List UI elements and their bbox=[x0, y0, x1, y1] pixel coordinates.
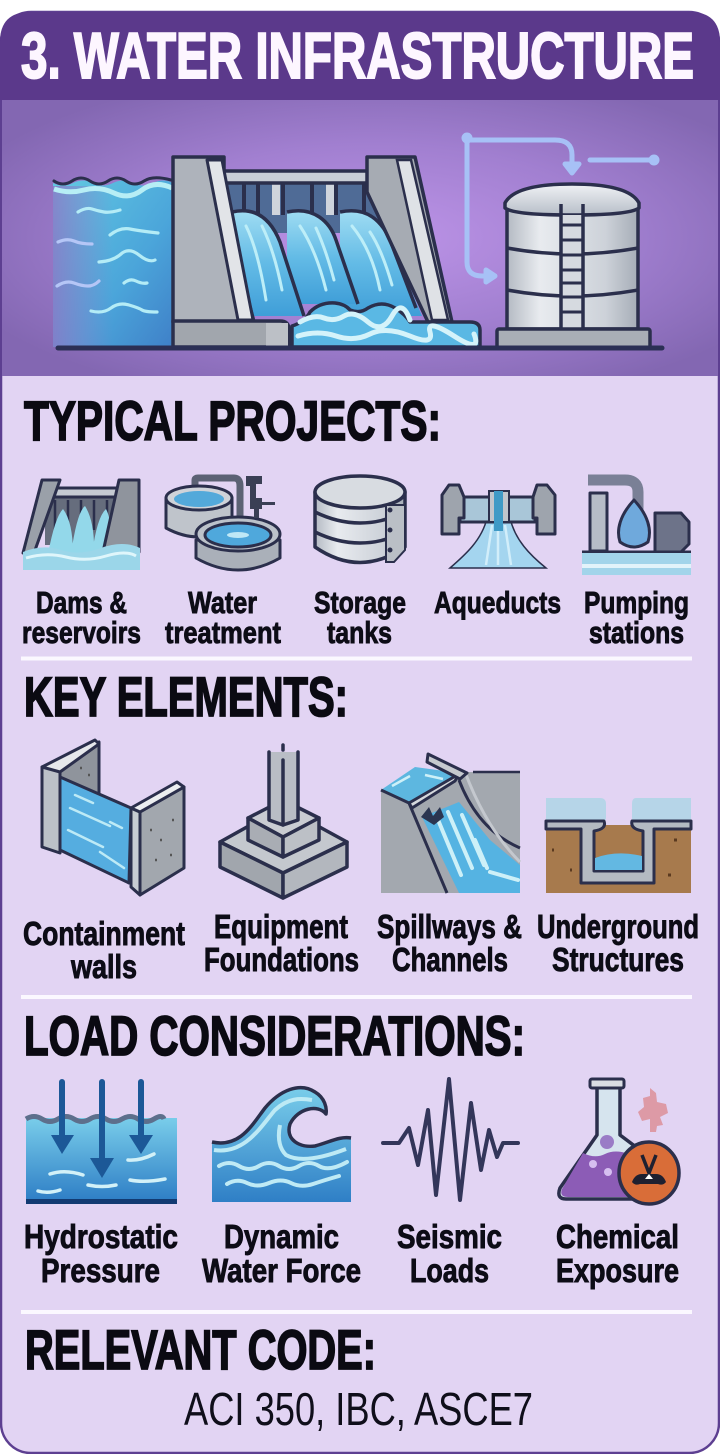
label: equipment foundations: Equipment bbox=[214, 908, 348, 945]
panel: header bar bbox=[0, 12, 720, 100]
label: containment walls bbox=[23, 915, 185, 985]
label: storage tanks: tanks bbox=[327, 615, 392, 650]
label: chemical exposure: Chemical bbox=[556, 1218, 679, 1255]
label: dams and reservoirs: Dams & bbox=[36, 585, 127, 620]
label: pumping stations: stations bbox=[589, 615, 684, 650]
icon: storage tanks bbox=[315, 476, 405, 562]
icon: containment walls bbox=[42, 740, 184, 895]
ground line bbox=[58, 346, 662, 350]
label: hydrostatic pressure: Pressure bbox=[41, 1252, 160, 1289]
label: dynamic water force bbox=[202, 1218, 361, 1289]
label: spillways and channels: Spillways & bbox=[377, 908, 522, 945]
icon: water treatment bbox=[166, 476, 280, 570]
icon: dams and reservoirs bbox=[23, 480, 140, 570]
water tower tank bbox=[497, 184, 650, 348]
label: dynamic water force: Water Force bbox=[202, 1252, 361, 1289]
label: dams and reservoirs: reservoirs bbox=[22, 615, 141, 650]
icon: underground structures bbox=[546, 798, 691, 893]
panel: hero illustration bbox=[2, 100, 718, 376]
reservoir water bbox=[53, 178, 173, 347]
text: code list: ACI 350, IBC, ASCE7 bbox=[184, 1383, 533, 1435]
label: equipment foundations bbox=[204, 908, 359, 978]
icon: chemical flask bbox=[559, 1079, 679, 1204]
icon: spillways and channels bbox=[381, 754, 520, 893]
icon: equipment foundations bbox=[220, 745, 347, 898]
label: containment walls: Containment bbox=[23, 915, 185, 952]
label: underground structures: Structures bbox=[552, 941, 684, 978]
label: dams and reservoirs bbox=[22, 585, 141, 650]
label: storage tanks: Storage bbox=[314, 585, 406, 620]
label: spillways and channels: Channels bbox=[392, 941, 508, 978]
label: chemical exposure bbox=[556, 1218, 679, 1289]
icon: hydrostatic pressure bbox=[26, 1082, 177, 1204]
icon: pumping stations bbox=[582, 480, 691, 575]
label: seismic loads: Seismic bbox=[397, 1218, 502, 1255]
label: storage tanks bbox=[314, 585, 406, 650]
label: hydrostatic pressure bbox=[24, 1218, 178, 1289]
icon: seismic wave bbox=[383, 1079, 518, 1200]
label: pumping stations bbox=[584, 585, 689, 650]
label: aqueducts: Aqueducts bbox=[434, 585, 561, 620]
label: spillways and channels bbox=[377, 908, 522, 978]
label: dynamic water force: Dynamic bbox=[224, 1218, 339, 1255]
label: underground structures bbox=[537, 908, 699, 978]
icon: dynamic water force bbox=[212, 1088, 351, 1202]
label: equipment foundations: Foundations bbox=[204, 941, 359, 978]
label: pumping stations: Pumping bbox=[584, 585, 689, 620]
label: water treatment bbox=[165, 585, 281, 650]
flow pipes and arrows bbox=[464, 135, 657, 282]
label: hydrostatic pressure: Hydrostatic bbox=[24, 1218, 178, 1255]
label: chemical exposure: Exposure bbox=[556, 1252, 679, 1289]
heading: key elements: KEY ELEMENTS: bbox=[24, 665, 348, 728]
label: water treatment: treatment bbox=[165, 615, 281, 650]
heading: load considerations: LOAD CONSIDERATIONS: bbox=[24, 1004, 525, 1067]
dam bbox=[173, 157, 480, 347]
label: water treatment: Water bbox=[188, 585, 257, 620]
heading: relevant code: RELEVANT CODE: bbox=[25, 1318, 376, 1381]
label: seismic loads bbox=[397, 1218, 502, 1289]
heading: typical projects: TYPICAL PROJECTS: bbox=[24, 389, 441, 452]
label: containment walls: walls bbox=[70, 948, 137, 985]
label: seismic loads: Loads bbox=[410, 1252, 489, 1289]
icon: aqueducts bbox=[442, 485, 555, 568]
